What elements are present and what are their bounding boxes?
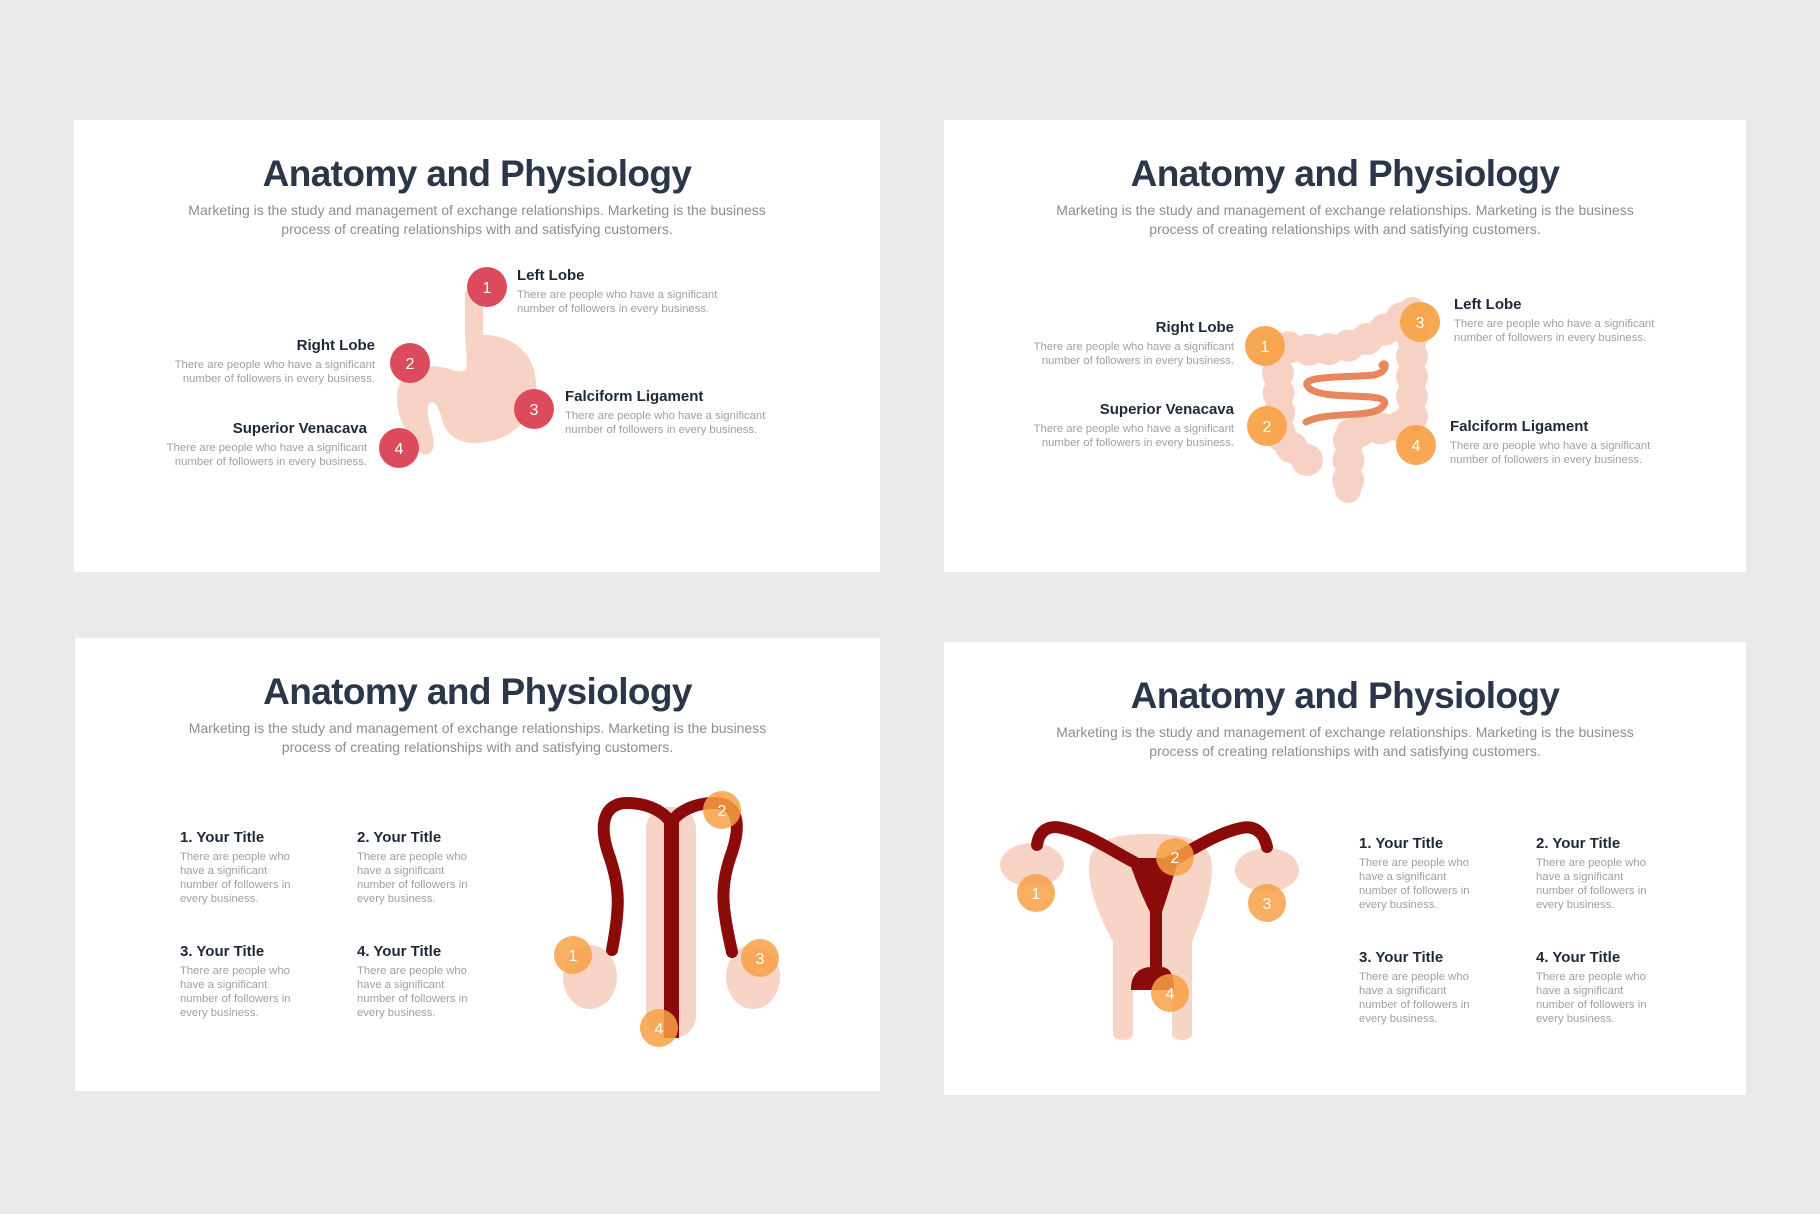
- item 3: There are people who: [1359, 971, 1469, 983]
- subtitle: process of creating relationships with and satisfying customers.: [1149, 743, 1541, 759]
- marker 3: [741, 939, 779, 977]
- item 4: every business.: [1536, 1013, 1614, 1025]
- marker 4: [640, 1009, 678, 1047]
- item 2: have a significant: [357, 865, 444, 877]
- marker 1: [1017, 874, 1055, 912]
- ovaries: [1000, 843, 1064, 887]
- label: superior venacava: [1034, 401, 1234, 449]
- stomach shape: [397, 292, 536, 455]
- item 2: number of followers in: [357, 879, 468, 891]
- label: falciform: There are people who have a significant: [565, 410, 765, 422]
- marker 3: 3: [1263, 896, 1272, 913]
- marker 3: 3: [1416, 315, 1425, 332]
- marker 3: [1400, 302, 1440, 342]
- title: Anatomy and Physiology: [263, 153, 691, 194]
- label: falciform: There are people who have a significant: [1450, 440, 1650, 452]
- intestine illustration: [1245, 297, 1440, 503]
- label: left lobe: [517, 267, 718, 315]
- marker 2: 2: [718, 803, 727, 820]
- label: superior venacava: There are people who have a significant: [167, 442, 367, 454]
- label: falciform: number of followers in every business.: [1450, 454, 1642, 466]
- label: superior venacava: number of followers in every business.: [1042, 437, 1234, 449]
- marker 1: [467, 267, 507, 307]
- marker 3: 3: [756, 951, 765, 968]
- label: left lobe: There are people who have a significant: [1454, 318, 1654, 330]
- item 4: There are people who: [1536, 971, 1646, 983]
- panel: intestine: [944, 120, 1746, 572]
- marker 2: 2: [1171, 850, 1180, 867]
- item 2: There are people who: [357, 851, 467, 863]
- male illustration: [554, 791, 780, 1047]
- panel: male reproductive: [75, 638, 880, 1091]
- item 3: [1359, 949, 1470, 1025]
- item 3: every business.: [180, 1007, 258, 1019]
- item 2: 2. Your Title: [1536, 835, 1620, 852]
- label: falciform: Falciform Ligament: [565, 388, 703, 405]
- item 3: [180, 943, 291, 1019]
- item 2: have a significant: [1536, 871, 1623, 883]
- item 4: have a significant: [1536, 985, 1623, 997]
- label: superior venacava: number of followers in every business.: [175, 456, 367, 468]
- marker 1: [1245, 326, 1285, 366]
- label: right lobe: Right Lobe: [1156, 319, 1234, 336]
- subtitle: [1056, 202, 1634, 237]
- marker 4: [1151, 974, 1189, 1012]
- item 4: number of followers in: [357, 993, 468, 1005]
- stomach illustration: [379, 267, 554, 468]
- marker 4: [379, 428, 419, 468]
- item 1: [180, 829, 291, 905]
- item 3: have a significant: [1359, 985, 1446, 997]
- subtitle: Marketing is the study and management of exchange relationships. Marketing is the business: [1056, 724, 1634, 740]
- subtitle: [189, 720, 766, 755]
- marker 4: 4: [395, 441, 404, 458]
- label: right lobe: number of followers in every business.: [183, 373, 375, 385]
- item 4: every business.: [357, 1007, 436, 1019]
- subtitle: process of creating relationships with and satisfying customers.: [282, 739, 673, 755]
- panel: stomach: [74, 120, 880, 572]
- subtitle: Marketing is the study and management of exchange relationships. Marketing is the business: [189, 720, 766, 736]
- marker 4: 4: [655, 1021, 664, 1038]
- item 3: 3. Your Title: [1359, 949, 1443, 966]
- label: left lobe: number of followers in every business.: [1454, 332, 1646, 344]
- item 1: 1. Your Title: [180, 829, 264, 846]
- label: falciform: Falciform Ligament: [1450, 418, 1588, 435]
- label: right lobe: There are people who have a significant: [175, 359, 375, 371]
- item 2: every business.: [357, 893, 436, 905]
- marker 2: [390, 343, 430, 383]
- label: superior venacava: [166, 420, 368, 468]
- subtitle: [1056, 724, 1634, 759]
- testes: [563, 945, 617, 1009]
- panel: female reproductive: [944, 642, 1746, 1095]
- subtitle: Marketing is the study and management of exchange relationships. Marketing is the business: [188, 202, 766, 218]
- shaft: [646, 807, 696, 1038]
- label: right lobe: Right Lobe: [297, 337, 375, 354]
- label: left lobe: There are people who have a significant: [517, 289, 717, 301]
- label: falciform: [1450, 418, 1650, 466]
- large intestine: [1277, 310, 1412, 490]
- subtitle: [188, 202, 766, 237]
- item 3: number of followers in: [1359, 999, 1470, 1011]
- item 2: every business.: [1536, 899, 1614, 911]
- item 4: [357, 943, 468, 1019]
- marker 2: 2: [406, 356, 415, 373]
- item 4: [1536, 949, 1647, 1025]
- item 4: have a significant: [357, 979, 444, 991]
- tubes and cavity: [1037, 827, 1267, 862]
- title: Anatomy and Physiology: [1131, 675, 1559, 716]
- item 4: There are people who: [357, 965, 467, 977]
- title: Anatomy and Physiology: [1131, 153, 1559, 194]
- title: Anatomy and Physiology: [263, 671, 692, 712]
- small intestine: [1306, 364, 1385, 422]
- subtitle: Marketing is the study and management of exchange relationships. Marketing is the business: [1056, 202, 1634, 218]
- label: right lobe: [174, 337, 375, 385]
- item 3: have a significant: [180, 979, 267, 991]
- item 2: There are people who: [1536, 857, 1646, 869]
- marker 3: 3: [530, 402, 539, 419]
- item 1: number of followers in: [180, 879, 291, 891]
- item 2: 2. Your Title: [357, 829, 441, 846]
- marker 4: 4: [1412, 438, 1421, 455]
- marker 1: [554, 936, 592, 974]
- item 2: number of followers in: [1536, 885, 1647, 897]
- marker 4: 4: [1166, 986, 1175, 1003]
- item 2: [357, 829, 468, 905]
- marker 1: 1: [1032, 886, 1041, 903]
- label: left lobe: number of followers in every business.: [517, 303, 709, 315]
- item 1: have a significant: [1359, 871, 1446, 883]
- label: superior venacava: There are people who have a significant: [1034, 423, 1234, 435]
- item 1: There are people who: [1359, 857, 1469, 869]
- marker 1: 1: [569, 948, 578, 965]
- marker 3: [1248, 884, 1286, 922]
- ducts: [604, 803, 737, 952]
- item 1: have a significant: [180, 865, 267, 877]
- label: right lobe: [1034, 319, 1234, 367]
- item 4: 4. Your Title: [1536, 949, 1620, 966]
- label: left lobe: Left Lobe: [1454, 296, 1522, 313]
- marker 2: 2: [1263, 419, 1272, 436]
- label: superior venacava: Superior Venacava: [1100, 401, 1234, 418]
- label: falciform: number of followers in every business.: [565, 424, 757, 436]
- marker 4: [1396, 425, 1436, 465]
- subtitle: process of creating relationships with and satisfying customers.: [1149, 221, 1541, 237]
- label: right lobe: There are people who have a significant: [1034, 341, 1234, 353]
- marker 2: [1156, 838, 1194, 876]
- female illustration: [1000, 821, 1299, 1040]
- label: falciform: [565, 388, 766, 436]
- subtitle: process of creating relationships with and satisfying customers.: [281, 221, 673, 237]
- item 3: There are people who: [180, 965, 290, 977]
- item 1: There are people who: [180, 851, 290, 863]
- item 1: number of followers in: [1359, 885, 1470, 897]
- marker 1: 1: [1261, 339, 1270, 356]
- marker 2: [703, 791, 741, 829]
- item 2: [1536, 835, 1647, 911]
- item 3: 3. Your Title: [180, 943, 264, 960]
- marker 1: 1: [483, 280, 492, 297]
- item 1: [1359, 835, 1470, 911]
- item 1: every business.: [180, 893, 258, 905]
- item 1: every business.: [1359, 899, 1438, 911]
- item 3: every business.: [1359, 1013, 1438, 1025]
- label: superior venacava: Superior Venacava: [233, 420, 367, 437]
- item 1: 1. Your Title: [1359, 835, 1443, 852]
- marker 2: [1247, 406, 1287, 446]
- label: left lobe: Left Lobe: [517, 267, 584, 284]
- marker 3: [514, 389, 554, 429]
- item 4: 4. Your Title: [357, 943, 441, 960]
- uterus body: [1089, 834, 1212, 1040]
- item 3: number of followers in: [180, 993, 291, 1005]
- label: right lobe: number of followers in every business.: [1042, 355, 1234, 367]
- item 4: number of followers in: [1536, 999, 1647, 1011]
- label: left lobe: [1454, 296, 1654, 344]
